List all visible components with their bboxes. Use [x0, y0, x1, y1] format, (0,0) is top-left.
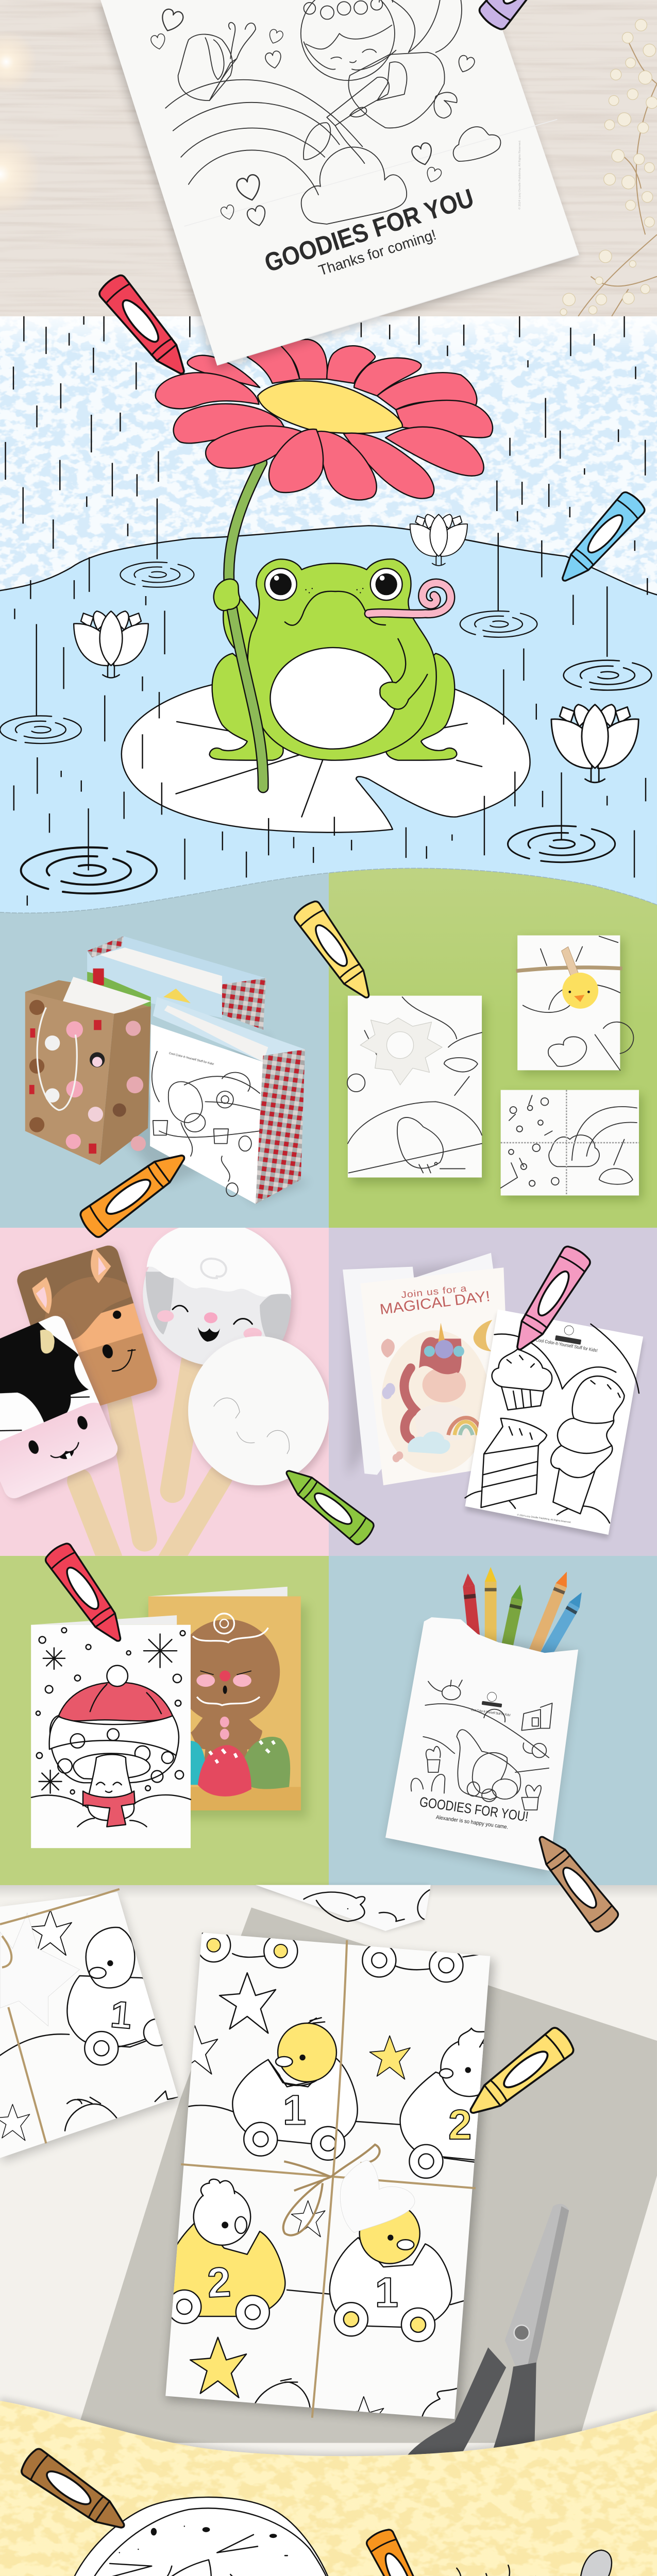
scissors	[405, 2204, 569, 2464]
decorative: baby's breath flowers	[560, 19, 657, 316]
flower	[156, 340, 493, 500]
snow and flakes	[36, 1628, 185, 1794]
race car chick one lower	[330, 2204, 452, 2342]
race car chick one lower: 1	[375, 2269, 398, 2316]
bag line art: dog, farm	[411, 1680, 552, 1810]
bagel seeds	[90, 2527, 332, 2576]
race lines	[187, 2105, 476, 2304]
lily pad	[122, 685, 530, 833]
bag slogan: Cool Color-It-Yourself Stuff for Kids!	[471, 1708, 511, 1717]
race car chick two yellow	[165, 2179, 285, 2329]
white bagel	[62, 2497, 342, 2576]
cupcake	[492, 1349, 552, 1410]
bag logo	[482, 1692, 502, 1707]
blank coloring fan	[188, 1336, 329, 1485]
twine	[516, 968, 622, 971]
sheet arches	[465, 1324, 639, 1523]
panel: paper fans	[0, 1228, 329, 1556]
stars	[173, 1973, 410, 2439]
gift: duck	[516, 936, 633, 1074]
race car chick two yellow: 2	[206, 2259, 232, 2307]
goodie bag	[385, 1567, 587, 1875]
gift: rainbow sprinkles	[501, 1090, 642, 1200]
goodie bag subtitle: Alexander is so happy you came.	[435, 1814, 509, 1831]
race car chick two right	[400, 2028, 505, 2178]
top row wheels	[200, 1933, 479, 1982]
pond shoreline	[0, 526, 657, 595]
card heading: Join us for a	[400, 1283, 467, 1300]
left gift twine	[0, 1889, 120, 2143]
water lilies	[74, 514, 638, 783]
gift: chick with bow	[347, 996, 485, 1184]
sheet heading: Cool Color-It-Yourself Stuff for Kids!	[535, 1337, 598, 1353]
panel: goodie bag and crayons	[329, 1556, 657, 1885]
cake slice	[481, 1418, 547, 1507]
panel: gift bags	[0, 845, 329, 1228]
fan sticks	[79, 1362, 220, 1578]
gum drops	[191, 1737, 290, 1797]
frog tongue	[369, 583, 451, 614]
crayon: yellow	[292, 899, 380, 1006]
bag dog illustration	[152, 1052, 260, 1196]
heart gift tag	[340, 2160, 415, 2232]
pond bottom edge	[0, 868, 657, 913]
invitation card	[360, 1267, 511, 1485]
coloring sheet	[465, 1310, 643, 1539]
content: gift bags and gifts	[25, 936, 642, 1204]
bag illustration: fairy	[301, 0, 462, 163]
left gift pattern: 1	[109, 1993, 133, 2037]
sheet fine print: © 2024 Lizzy Doodle Publishing. All Rights Reserved.	[517, 1513, 571, 1523]
race car chick one: 1	[283, 2087, 306, 2134]
small gift corner	[256, 1885, 431, 1931]
frog back legs	[210, 653, 457, 760]
frog	[210, 463, 457, 788]
bagel scene	[0, 2497, 657, 2576]
yellow wallpaper texture	[0, 2396, 657, 2576]
envelope	[343, 1253, 499, 1477]
card main title: MAGICAL DAY!	[379, 1288, 491, 1318]
kraft gift bag	[25, 977, 151, 1165]
gingerbread man	[175, 1614, 280, 1770]
mushroom card	[31, 1615, 191, 1848]
sheet logo	[555, 1326, 581, 1345]
frog belly	[270, 648, 396, 749]
bag illustration: clouds	[301, 127, 501, 224]
race car chick two right: 2	[448, 2102, 471, 2148]
rain lines upper	[6, 316, 647, 619]
grey cloth	[73, 1907, 657, 2443]
left gift pattern	[0, 1910, 178, 2141]
panel: invitation cards	[329, 1228, 657, 1556]
gingerbread card	[148, 1587, 308, 1818]
star gift tag	[0, 1913, 79, 2026]
rain lines lower	[14, 586, 646, 906]
duck tag	[562, 973, 598, 1009]
steam	[457, 2565, 535, 2576]
goodie bag title: GOODIES FOR YOU!	[418, 1794, 529, 1824]
crayons: brown, orange, green	[18, 2446, 440, 2576]
bag title: GOODIES FOR YOU	[261, 183, 477, 278]
bag illustration: hearts	[150, 7, 476, 228]
bow	[283, 2145, 380, 2235]
frog hands	[214, 579, 427, 709]
horse fan	[17, 1245, 163, 1412]
crayons: tan, yellow	[461, 1828, 621, 2125]
pond	[0, 526, 657, 913]
cow fan	[0, 1308, 130, 1506]
content: row 2	[0, 1222, 643, 1875]
crayons in bag	[462, 1567, 587, 1666]
stem of the flower	[229, 463, 263, 788]
photo section background	[0, 1885, 657, 2478]
back gift bag	[87, 936, 268, 1185]
spoon	[547, 2550, 612, 2576]
section: frog pond scene	[0, 463, 651, 906]
wrap pattern	[165, 1928, 505, 2439]
background: rainy sky	[0, 316, 657, 677]
frog body	[248, 559, 436, 760]
ripples	[0, 562, 651, 893]
white bow	[360, 1018, 442, 1085]
soup bowl	[367, 2550, 630, 2576]
frog eyes	[265, 568, 402, 600]
frog mouth and freckles	[285, 588, 385, 625]
ice cream	[551, 1376, 625, 1514]
partial chicks at the bottom	[251, 2379, 457, 2422]
sheep fan	[143, 1222, 291, 1366]
main gift shadow	[165, 1937, 494, 2423]
left gift	[0, 1889, 180, 2162]
crayons: red, purple, blue	[96, 0, 648, 590]
frog left arm	[223, 597, 258, 657]
clothespin	[562, 946, 580, 979]
bag header text: Cool Color-It-Yourself Stuff for Kids!	[169, 1052, 214, 1066]
unicorn illustration	[381, 1320, 492, 1473]
white coloring gift bag	[150, 997, 310, 1204]
flower centre	[258, 381, 402, 433]
bag subtitle: Thanks for coming!	[317, 227, 439, 279]
yellow bagel section wave	[0, 2398, 657, 2576]
treat bag with fairy	[99, 0, 579, 369]
bag illustration: butterfly and rainbow	[165, 23, 362, 195]
main gift	[165, 1933, 490, 2419]
product panels grid	[0, 845, 657, 1885]
bag fine print: © 2024 Lizzy Doodle Publishing. All Rights Reserved.	[518, 140, 521, 210]
fans group	[0, 1222, 329, 1578]
mushroom character	[31, 1666, 191, 1827]
panel: wrapped gifts	[329, 845, 657, 1228]
kraft bag pattern	[29, 1000, 146, 1154]
panel: holiday cards	[0, 1556, 329, 1885]
race car chick one	[232, 2018, 358, 2160]
background: wooden table	[0, 0, 657, 316]
bagel face	[110, 2535, 258, 2576]
crayons: orange, green, pink, red	[43, 1144, 593, 1649]
twine	[181, 1940, 476, 2418]
photo section: wrapped gifts on cloth	[0, 1885, 657, 2464]
